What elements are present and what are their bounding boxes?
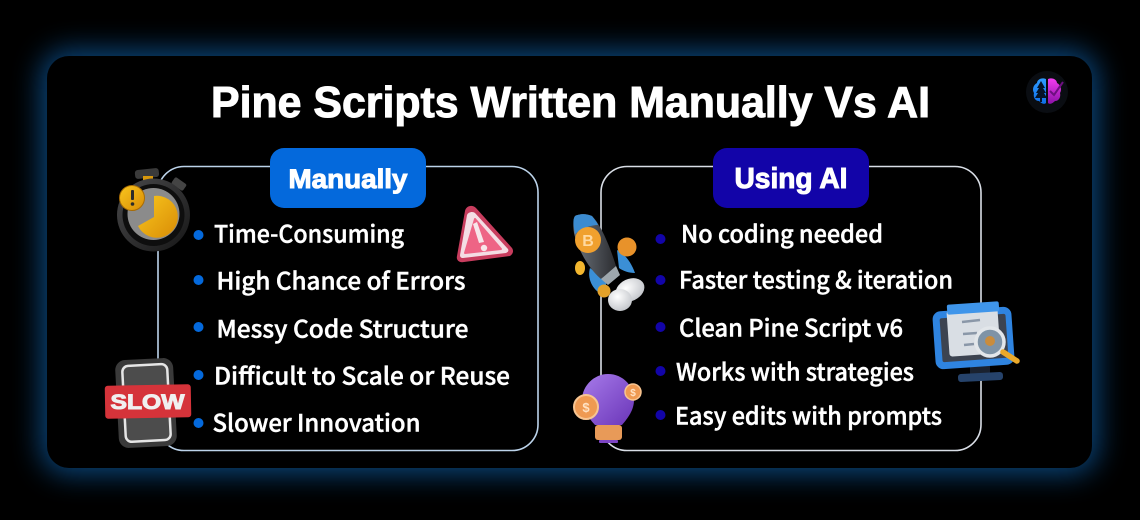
list: manually drawbacks: Slower Innovation <box>212 404 420 438</box>
list: ai benefits: Easy edits with prompts <box>675 396 942 432</box>
list: manually drawbacks: High Chance of Errors <box>216 262 466 296</box>
badge: using ai: Using AI <box>734 163 848 195</box>
icon: rocket <box>573 214 648 311</box>
panel: using ai <box>573 148 1017 450</box>
icon: purple light bulb with coins: $ <box>630 388 636 399</box>
icon: stopwatch <box>117 168 190 252</box>
badge: manually <box>270 148 426 208</box>
list: manually drawbacks: Difficult to Scale or Reuse <box>214 356 510 392</box>
icon: rocket: B <box>582 233 594 250</box>
badge: manually: Manually <box>288 164 408 194</box>
list: ai benefits: Faster testing & iteration <box>679 260 953 296</box>
icon: slow phone <box>105 358 191 448</box>
panel: manually <box>105 148 538 450</box>
icon: brain logo <box>1026 71 1068 113</box>
list: manually drawbacks: Messy Code Structure <box>216 310 468 344</box>
list: ai benefits: Works with strategies <box>676 352 914 388</box>
icon: slow phone: SLOW <box>110 391 185 414</box>
icon: monitor with magnifier <box>932 301 1017 382</box>
list: ai benefits: Clean Pine Script v6 <box>679 308 903 344</box>
badge: using ai <box>713 148 869 208</box>
icon: purple light bulb with coins: $ <box>582 400 590 415</box>
list: ai benefits: No coding needed <box>681 214 883 250</box>
icon: purple light bulb with coins <box>574 374 641 443</box>
panel outline: using ai <box>601 166 981 450</box>
icon: warning triangle <box>457 206 513 262</box>
list: ai benefits <box>656 214 953 432</box>
list: manually drawbacks: Time-Consuming <box>214 214 404 250</box>
background card with blue glow <box>47 56 1092 468</box>
panel outline: manually <box>158 166 538 450</box>
list: manually drawbacks <box>194 214 510 438</box>
title: Pine Scripts Written Manually Vs AI <box>211 78 930 127</box>
